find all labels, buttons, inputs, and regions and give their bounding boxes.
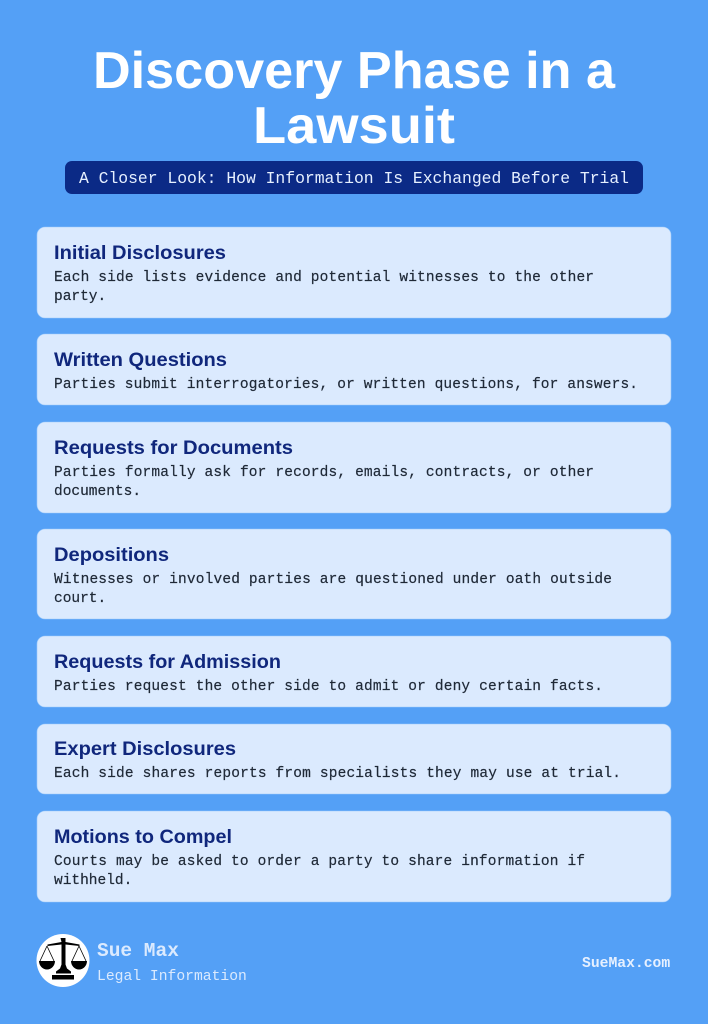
panel: Motions to Compel: Motions to Compel <box>54 826 232 848</box>
panel: Initial Disclosures: Each side lists evidence and potential witnesses to the other <box>54 270 594 286</box>
panel: Depositions <box>37 529 671 619</box>
title: Discovery Phase in a <box>93 42 616 100</box>
panel: Written Questions: Parties submit interrogatories, or written questions, for answers. <box>54 377 638 393</box>
panel: Depositions: Witnesses or involved parties are questioned under oath outside <box>54 572 612 588</box>
title: Lawsuit <box>253 97 455 155</box>
panel: Depositions: court. <box>54 591 106 607</box>
panel: Expert Disclosures: Expert Disclosures <box>54 738 236 760</box>
footer brand text: Sue Max <box>97 940 179 962</box>
panel: Requests for Documents: documents. <box>54 484 141 500</box>
panel: Initial Disclosures: Initial Disclosures <box>54 242 226 264</box>
panel: Expert Disclosures: Each side shares reports from specialists they may use at trial. <box>54 766 621 782</box>
icon: scales of justice logo <box>36 934 90 987</box>
website link: SueMax.com <box>582 956 670 972</box>
panel: Requests for Documents <box>37 422 671 513</box>
panel: Expert Disclosures <box>37 724 671 794</box>
panel: Motions to Compel: Courts may be asked to order a party to share information if <box>54 854 585 870</box>
panel: Requests for Documents: Parties formally ask for records, emails, contracts, or other <box>54 465 594 481</box>
panel: Requests for Admission: Requests for Admission <box>54 651 281 673</box>
panel: Requests for Documents: Requests for Documents <box>54 437 293 459</box>
panel: Motions to Compel: withheld. <box>54 873 132 889</box>
panel: Depositions: Depositions <box>54 544 169 566</box>
subtitle banner: A Closer Look: How Information Is Exchanged Before Trial <box>79 169 629 188</box>
title <box>93 42 616 155</box>
panel: Written Questions <box>37 334 671 405</box>
panel: Motions to Compel <box>37 811 671 902</box>
subtitle banner <box>65 161 643 194</box>
footer brand text: Legal Information <box>97 969 247 985</box>
panel: Requests for Admission: Parties request the other side to admit or deny certain facts. <box>54 679 603 695</box>
panel: Initial Disclosures <box>37 227 671 318</box>
panel: Initial Disclosures: party. <box>54 289 106 305</box>
panel: Requests for Admission <box>37 636 671 707</box>
panel: Written Questions: Written Questions <box>54 349 227 371</box>
footer brand text <box>97 940 247 985</box>
